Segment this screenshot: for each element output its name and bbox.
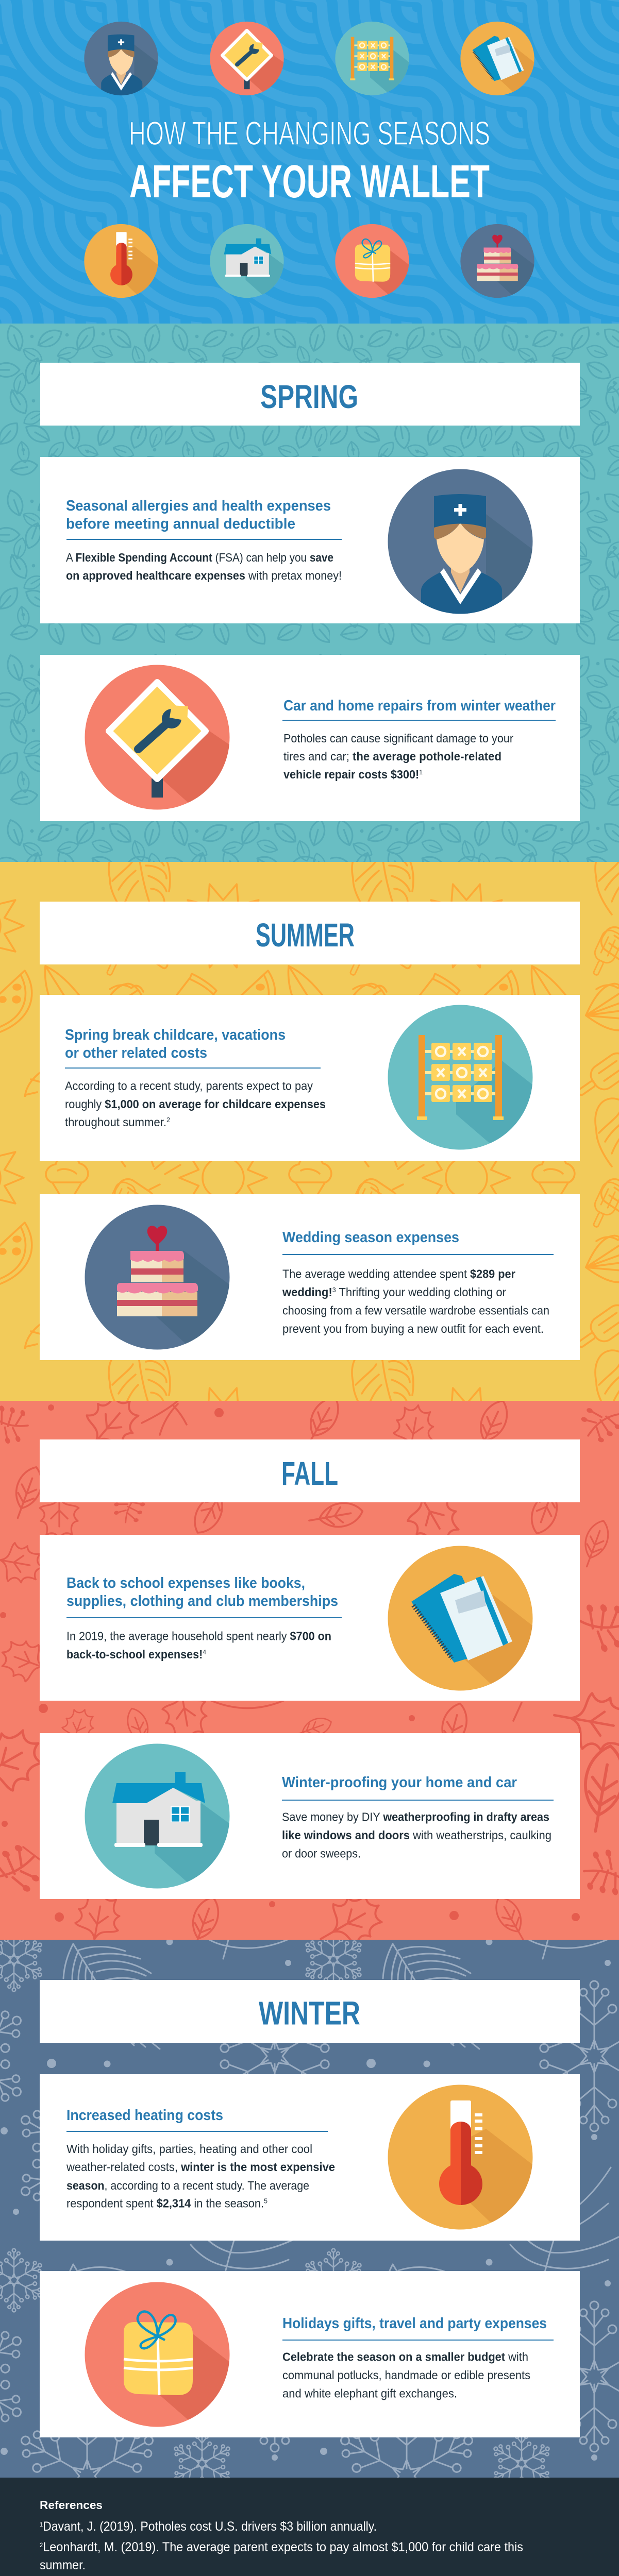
- icon: thermometer: [84, 224, 158, 298]
- summer heading: [40, 902, 580, 964]
- card body text: tires and car; the average pothole-related: [283, 750, 501, 763]
- card: winter-proofing: [40, 1733, 580, 1899]
- card heading: Car and home repairs from winter weather: [283, 698, 556, 714]
- card: seasonal allergies: [40, 457, 580, 623]
- card body text: In 2019, the average household spent nearly $700 on: [66, 1629, 331, 1642]
- card body text: A Flexible Spending Account (FSA) can help you save: [66, 551, 333, 564]
- card body text: The average wedding attendee spent $289 per: [282, 1267, 515, 1281]
- card body text: vehicle repair costs $300!: [283, 768, 419, 781]
- icon: house: [210, 224, 284, 298]
- card body text: 3: [332, 1286, 336, 1294]
- card heading: [66, 498, 331, 532]
- winter heading: [40, 1980, 580, 2043]
- card body text: choosing from a few versatile wardrobe essentials can: [282, 1303, 549, 1317]
- icon: thermometer: [388, 2084, 533, 2230]
- card body text: roughly $1,000 on average for childcare expenses: [65, 1097, 326, 1111]
- card: wedding season: [40, 1194, 580, 1360]
- card body text: or door sweeps.: [282, 1846, 361, 1860]
- card heading: Seasonal allergies and health expenses: [66, 498, 331, 514]
- fall heading: [40, 1439, 580, 1502]
- icon: nurse: [388, 469, 533, 619]
- card body text: respondent spent $2,314 in the season.: [66, 2197, 268, 2210]
- card body text: 1: [419, 768, 423, 776]
- card body text: back-to-school expenses!: [66, 1648, 203, 1661]
- card body text: communal potlucks, handmade or edible presents: [282, 2368, 530, 2382]
- card heading: supplies, clothing and club memberships: [66, 1593, 338, 1609]
- card heading: Increased heating costs: [66, 2107, 223, 2124]
- icon: abacus: [335, 22, 409, 95]
- references list: summer.: [40, 2558, 86, 2572]
- card heading: Spring break childcare, vacations: [65, 1027, 286, 1043]
- references list: Leonhardt, M. (2019). The average parent expects to pay almost $1,000 for child care this: [43, 2540, 523, 2554]
- card body text: and white elephant gift exchanges.: [282, 2386, 457, 2400]
- card body text: [282, 2350, 530, 2400]
- icon: road sign with wrench: [210, 22, 284, 95]
- summer heading: SUMMER: [256, 917, 355, 954]
- references list: [40, 2519, 547, 2576]
- references list: 1: [40, 2521, 43, 2528]
- card body text: season, according to a recent study. The average: [66, 2179, 309, 2192]
- icon: house: [85, 1743, 230, 1889]
- card body text: Potholes can cause significant damage to your: [283, 732, 513, 745]
- icon: road sign with wrench: [85, 665, 230, 810]
- card body text: With holiday gifts, parties, heating and other cool: [66, 2142, 312, 2156]
- icon: wedding cake: [85, 1205, 230, 1350]
- card: back to school: [40, 1535, 580, 1701]
- card body text: on approved healthcare expenses with pretax money!: [66, 569, 342, 582]
- card heading: Holidays gifts, travel and party expenses: [282, 2315, 547, 2332]
- panel: fall: [0, 1386, 619, 1960]
- references heading: References: [40, 2499, 103, 2512]
- card heading: before meeting annual deductible: [66, 516, 295, 532]
- card: car and home repairs: [40, 655, 580, 821]
- card body text: like windows and doors with weatherstrips, caulking: [282, 1828, 551, 1842]
- card body text: 2: [166, 1116, 170, 1124]
- panel: winter: [0, 1940, 619, 2478]
- card body text: [282, 1810, 551, 1860]
- card body text: [66, 2142, 335, 2210]
- card heading: Wedding season expenses: [282, 1229, 459, 1246]
- header panel: [0, 0, 619, 324]
- card body text: 5: [264, 2197, 267, 2205]
- card body text: Save money by DIY weatherproofing in drafty areas: [282, 1810, 549, 1824]
- card body text: 4: [203, 1648, 206, 1656]
- panel: summer: [0, 862, 619, 1401]
- card: spring break childcare: [40, 995, 580, 1161]
- icon: abacus: [388, 1005, 533, 1150]
- references list: 2: [40, 2541, 43, 2549]
- spring heading: SPRING: [260, 378, 358, 415]
- panel: spring: [0, 324, 619, 862]
- card body text: [282, 1267, 549, 1335]
- card body text: [66, 1629, 331, 1661]
- icon: nurse: [84, 22, 158, 98]
- card heading: or other related costs: [65, 1045, 207, 1061]
- icon: notebooks: [460, 22, 534, 95]
- icon: notebooks: [388, 1546, 533, 1691]
- icon: gift: [85, 2282, 230, 2427]
- card body text: wedding!: [282, 1285, 332, 1299]
- icon: gift: [335, 224, 409, 298]
- card: heating costs: [40, 2074, 580, 2241]
- card body text: According to a recent study, parents expect to pay: [65, 1079, 313, 1092]
- references list: Davant, J. (2019). Potholes cost U.S. drivers $3 billion annually.: [43, 2519, 377, 2534]
- spring heading: [40, 363, 580, 426]
- fall leaf pattern: [0, 1386, 619, 1960]
- card body text: Celebrate the season on a smaller budget with: [282, 2350, 528, 2364]
- icon: wedding cake: [460, 224, 534, 298]
- card heading: Winter-proofing your home and car: [282, 1774, 517, 1791]
- card heading: [66, 1575, 338, 1609]
- fall heading: FALL: [281, 1455, 338, 1492]
- card body text: [66, 551, 342, 582]
- card body text: Thrifting your wedding clothing or: [336, 1285, 506, 1299]
- winter heading: WINTER: [259, 1995, 360, 2032]
- panel: references footer: [0, 2478, 619, 2576]
- card heading: [65, 1027, 286, 1061]
- title: [129, 114, 490, 208]
- card: holiday expenses: [40, 2271, 580, 2437]
- card body text: throughout summer.: [65, 1115, 171, 1129]
- card body text: [283, 732, 513, 781]
- card heading: Back to school expenses like books,: [66, 1575, 305, 1591]
- card body text: prevent you from buying a new outfit for each event.: [282, 1322, 544, 1335]
- card body text: [65, 1079, 326, 1129]
- card body text: weather-related costs, winter is the most expensive: [66, 2160, 335, 2174]
